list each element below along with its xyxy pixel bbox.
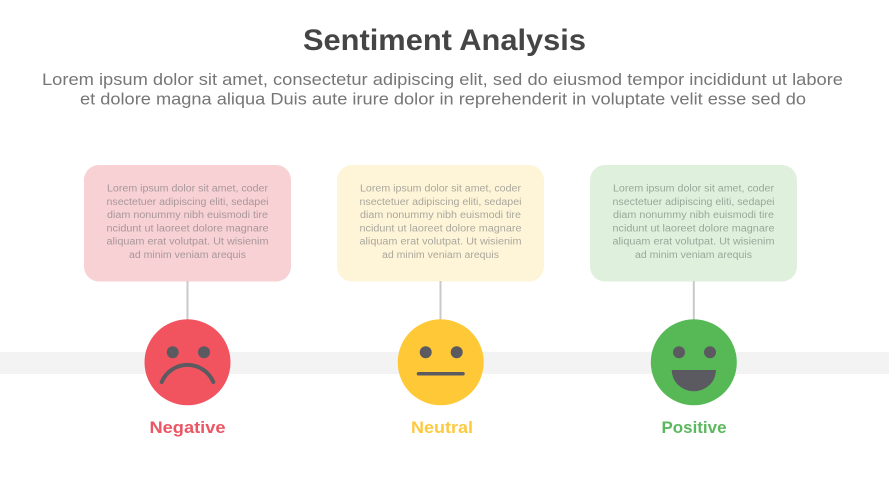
icon: neutral face [398,319,484,405]
panel: positive [590,165,797,437]
positive card text: diam nonummy nibh euismodi tire [613,210,774,221]
timeline band [0,352,889,374]
negative card text [106,184,269,261]
neutral card [337,165,544,282]
negative card [84,165,291,282]
positive card [590,165,797,282]
negative card text: ad minim veniam arequis [129,250,246,261]
subtitle text: Lorem ipsum dolor sit amet, consectetur adipiscing elit, sed do eiusmod tempor incididunt ut labore [42,70,843,89]
positive label: Positive [662,418,726,437]
positive card text: nsectetuer adipiscing eliti, sedapei [612,197,774,208]
positive connector [693,281,695,321]
neutral card text: aliquam erat volutpat. Ut wisienim [360,237,522,248]
neutral card text: nsectetuer adipiscing eliti, sedapei [360,197,522,208]
neutral connector [440,281,442,321]
negative card text: nsectetuer adipiscing eliti, sedapei [106,197,268,208]
icon: positive face [651,319,737,405]
negative label: Negative [150,418,226,437]
neutral card text [360,184,522,261]
positive card text: aliquam erat volutpat. Ut wisienim [612,237,774,248]
panel: negative [84,165,291,437]
neutral card text: Lorem ipsum dolor sit amet, coder [360,184,522,194]
positive card text [612,184,775,261]
subtitle text: et dolore magna aliqua Duis aute irure dolor in reprehenderit in voluptate velit esse sed do [80,90,806,108]
positive card text: ncidunt ut laoreet dolore magnare [612,223,775,234]
negative connector [186,281,188,321]
positive card text: Lorem ipsum dolor sit amet, coder [613,184,775,194]
negative card text: diam nonummy nibh euismodi tire [107,210,268,221]
subtitle text [42,70,843,108]
negative card text: Lorem ipsum dolor sit amet, coder [107,184,269,194]
neutral card text: ad minim veniam arequis [382,250,499,261]
neutral label: Neutral [411,418,473,437]
title: Sentiment Analysis [303,24,586,57]
icon: negative face [144,319,230,405]
negative card text: ncidunt ut laoreet dolore magnare [106,223,269,234]
panel: neutral [337,165,544,437]
neutral card text: ncidunt ut laoreet dolore magnare [360,223,522,234]
neutral card text: diam nonummy nibh euismodi tire [360,210,521,221]
negative card text: aliquam erat volutpat. Ut wisienim [106,237,268,248]
positive card text: ad minim veniam arequis [635,250,752,261]
